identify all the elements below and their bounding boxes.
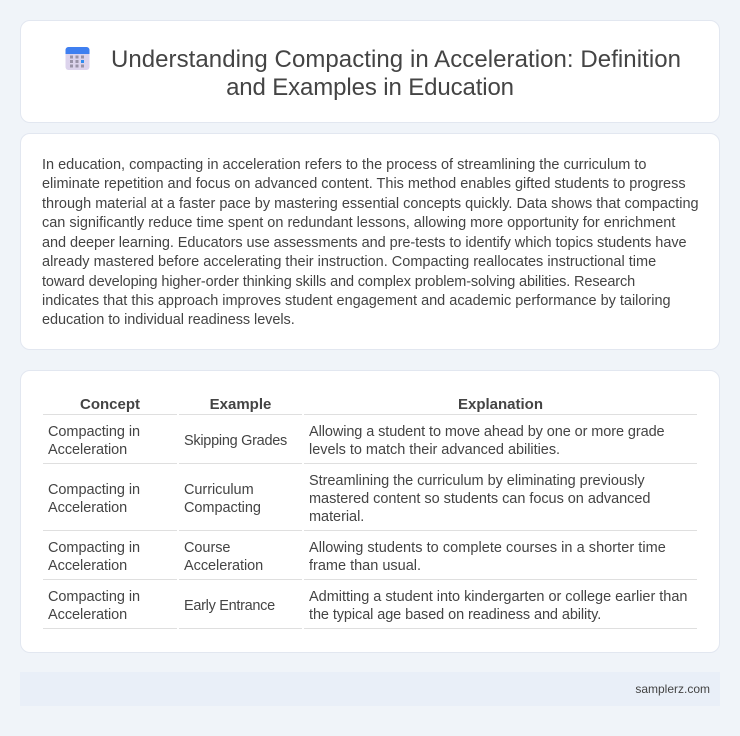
row 4: Acceleration xyxy=(48,607,127,623)
table header: Example: Example xyxy=(210,396,271,413)
footer bar xyxy=(20,672,720,706)
row 2: Acceleration xyxy=(48,500,127,516)
row 2 xyxy=(48,473,650,525)
row 3: Acceleration xyxy=(184,558,263,574)
row 1: Allowing a student to move ahead by one or more grade xyxy=(309,424,665,440)
paragraph text: can significantly reduce time spent on redundant lessons, allowing more opportunity for enrichment xyxy=(42,215,675,231)
row 3 xyxy=(48,540,666,574)
panel: intro paragraph xyxy=(20,133,720,350)
panel: table xyxy=(20,370,720,653)
icon: calendar xyxy=(66,47,90,70)
title line 1: Understanding Compacting in Acceleration: Definition xyxy=(111,46,681,73)
row 2: Compacting xyxy=(184,500,261,516)
row 4: the typical age based on readiness and ability. xyxy=(309,607,601,623)
row 4 xyxy=(48,589,687,623)
row 3: Course xyxy=(184,540,230,556)
footer text: samplerz.com xyxy=(635,682,710,696)
row 4: Early Entrance xyxy=(184,598,275,614)
row 2: material. xyxy=(309,509,364,525)
row 1: Skipping Grades xyxy=(184,433,287,449)
row 3: Acceleration xyxy=(48,558,127,574)
row 2: Curriculum xyxy=(184,482,254,498)
row 1: Compacting in xyxy=(48,424,140,440)
paragraph text: through material at a faster pace by mastering essential concepts quickly. Data shows that compacting xyxy=(42,196,699,212)
paragraph text xyxy=(42,157,699,328)
row 2: mastered content so students can focus on advanced xyxy=(309,491,650,507)
row 3: Allowing students to complete courses in a shorter time xyxy=(309,540,666,556)
row 1 xyxy=(48,424,665,458)
paragraph text: eliminate repetition and focus on advanced content. This method enables gifted students to progress xyxy=(42,176,686,192)
row 4: Compacting in xyxy=(48,589,140,605)
paragraph text: already mastered before accelerating their instruction. Compacting reallocates instructional time xyxy=(42,254,656,270)
row 2: Streamlining the curriculum by eliminating previously xyxy=(309,473,645,489)
row 4: Admitting a student into kindergarten or college earlier than xyxy=(309,589,687,605)
row 2: Compacting in xyxy=(48,482,140,498)
row 3: Compacting in xyxy=(48,540,140,556)
table header: Concept: Concept xyxy=(80,396,140,413)
table header: Explanation: Explanation xyxy=(458,396,543,413)
row 1: levels to match their advanced abilities. xyxy=(309,442,560,458)
row 1: Acceleration xyxy=(48,442,127,458)
paragraph text: indicates that this approach improves student engagement and academic performance by tailoring xyxy=(42,293,671,309)
title line 2: and Examples in Education xyxy=(226,74,514,101)
paragraph text: and deeper learning. Educators use assessments and pre-tests to identify which topics students have xyxy=(42,235,687,251)
paragraph text: education to individual readiness levels. xyxy=(42,312,295,328)
paragraph text: toward developing higher-order thinking skills and complex problem-solving abilities. Research xyxy=(42,274,635,290)
row 3: frame than usual. xyxy=(309,558,421,574)
panel: title card xyxy=(20,20,720,123)
paragraph text: In education, compacting in acceleration refers to the process of streamlining the curriculum to xyxy=(42,157,646,173)
